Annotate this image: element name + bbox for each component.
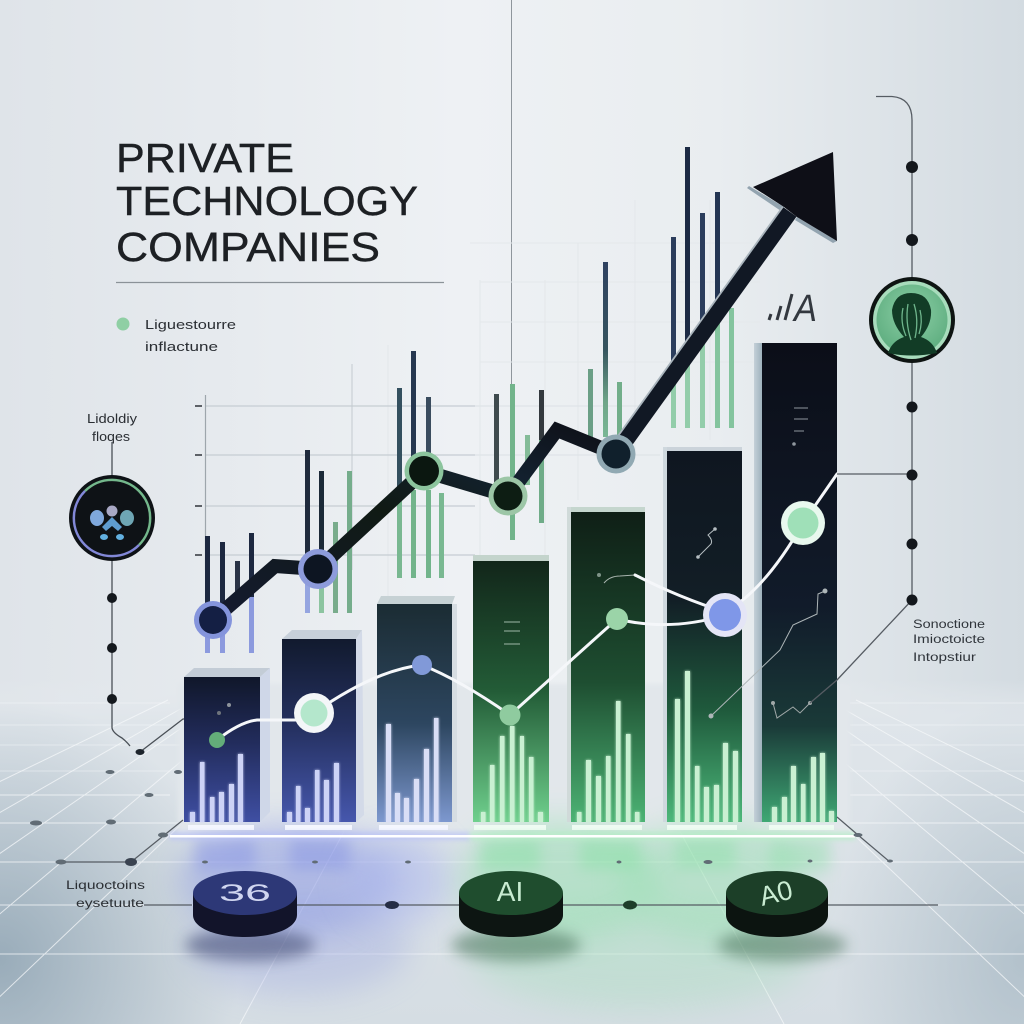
title: COMPANIES xyxy=(116,224,380,270)
label: liquidity flows: Lidoldiy xyxy=(87,412,138,426)
mini bars 6 xyxy=(675,671,738,822)
node 4 xyxy=(488,476,528,516)
mini bars 1 xyxy=(190,754,243,822)
group 6 xyxy=(671,147,734,428)
icon: portrait badge xyxy=(869,277,955,363)
upper thin bars xyxy=(205,147,734,653)
panel behind bars xyxy=(178,684,850,834)
main rising arrow xyxy=(194,152,837,639)
center vertical rule xyxy=(510,0,512,480)
bar 1 xyxy=(184,668,270,822)
node 3 xyxy=(404,452,444,490)
legend xyxy=(116,317,236,354)
node: green small xyxy=(209,732,225,748)
chart grid xyxy=(195,200,760,596)
title: PRIVATE xyxy=(116,135,294,181)
label: liquidity flows: floqes xyxy=(92,430,130,444)
label: lower left note: eysetuute xyxy=(76,896,144,910)
label: lower left note xyxy=(66,878,145,910)
floor connector lines and dots xyxy=(30,770,938,910)
label: right note: Sonoctione xyxy=(913,619,985,631)
label: right note xyxy=(913,619,985,664)
bar 5 xyxy=(567,507,645,822)
label: right note: Intopstiur xyxy=(913,652,976,664)
group 1 xyxy=(205,533,254,653)
mini bars 2 xyxy=(287,763,339,822)
title xyxy=(116,135,418,270)
bar 6 xyxy=(663,447,742,822)
node: mint large xyxy=(294,693,334,733)
mini bars 3 xyxy=(386,718,438,822)
group 4 xyxy=(494,384,544,540)
label: liquidity flows xyxy=(87,412,138,444)
mini bars 5 xyxy=(577,701,640,822)
title rule xyxy=(116,282,444,284)
label: lower left note: Liquoctoins xyxy=(66,878,145,892)
left connector line xyxy=(107,442,212,755)
bar 2 xyxy=(282,630,364,822)
label: right note: Imioctoicte xyxy=(913,634,985,646)
floor reflections xyxy=(180,820,830,1010)
node 1 xyxy=(194,601,232,639)
node: mint xyxy=(500,704,520,726)
puck: A0: A0 xyxy=(756,875,796,912)
node: blue xyxy=(412,655,432,675)
legend: inflactune xyxy=(145,339,218,354)
node 5 xyxy=(596,434,636,474)
group 5 xyxy=(588,262,622,440)
group 2 xyxy=(305,450,352,613)
node 2 xyxy=(298,549,338,589)
right timeline connector xyxy=(810,96,918,703)
mini bars 4 xyxy=(481,726,543,822)
puck: A0 xyxy=(717,871,847,961)
legend: Liguestourre xyxy=(145,317,236,332)
bar signal label: A xyxy=(792,288,817,330)
mini bars 7 xyxy=(772,753,834,822)
icon: liquidity badge xyxy=(69,475,155,561)
puck: AI: AI xyxy=(497,876,523,907)
puck: 36 xyxy=(185,871,315,961)
node: blue large xyxy=(703,593,747,637)
bar signal label xyxy=(769,288,817,330)
base glow strips xyxy=(170,825,855,840)
puck: AI xyxy=(451,871,581,961)
bar 7 xyxy=(754,343,837,822)
node: mint medium xyxy=(606,608,628,630)
bar 4 xyxy=(473,555,549,822)
floor plane xyxy=(0,680,1024,1024)
puck: 36: 36 xyxy=(219,880,271,907)
bar 3 xyxy=(377,596,457,822)
white trend curve xyxy=(209,474,837,748)
node: mint top xyxy=(781,501,825,545)
thin trend line across bars xyxy=(709,589,827,718)
title: TECHNOLOGY xyxy=(116,178,418,224)
group 3 xyxy=(397,351,444,578)
